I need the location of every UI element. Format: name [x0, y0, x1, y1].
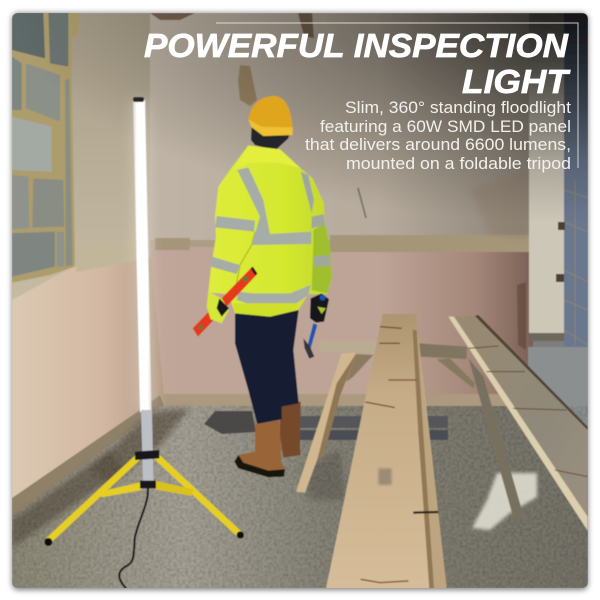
description: mounted on a foldable tripod	[346, 155, 571, 173]
left glove grip	[217, 298, 229, 317]
right wall and blocks	[529, 13, 588, 358]
hammer	[303, 323, 317, 359]
description: that delivers around 6600 lumens,	[305, 136, 571, 154]
right plank	[448, 315, 588, 531]
legs	[296, 353, 357, 493]
back wall	[148, 13, 533, 415]
sleeve seam	[236, 232, 256, 284]
brick window	[12, 13, 80, 283]
left glove	[207, 292, 229, 323]
description: featuring a 60W SMD LED panel	[320, 118, 571, 136]
cable	[119, 488, 148, 589]
dark corner overlay	[68, 13, 588, 208]
right glove	[310, 293, 329, 323]
jacket	[208, 145, 332, 317]
lower bracket	[140, 481, 156, 488]
title frame	[216, 23, 578, 168]
sawhorse	[296, 340, 524, 520]
trousers	[235, 310, 299, 424]
tripod	[44, 450, 244, 589]
left foot	[44, 538, 52, 546]
left wall	[12, 13, 165, 520]
light tube	[133, 100, 152, 412]
worker	[193, 96, 332, 477]
center plank	[326, 314, 447, 589]
pole	[141, 410, 154, 484]
title: POWERFUL INSPECTION	[144, 27, 569, 64]
description	[305, 99, 571, 173]
title: LIGHT	[462, 63, 571, 100]
hem band	[233, 303, 298, 317]
title	[144, 27, 571, 100]
hair and neck	[250, 127, 290, 150]
glow	[131, 100, 156, 410]
helmet	[248, 96, 293, 136]
beam	[319, 340, 377, 353]
spirit level	[193, 267, 257, 337]
floor	[12, 347, 588, 588]
front boot	[234, 420, 285, 477]
description: Slim, 360° standing floodlight	[345, 99, 571, 117]
upper bracket	[135, 450, 159, 460]
tube cap	[133, 97, 144, 102]
floodlight on tripod	[44, 97, 244, 589]
right foot	[237, 531, 244, 539]
bright patch on floor	[472, 473, 537, 530]
pipes on floor	[204, 411, 448, 440]
reflective strips	[237, 167, 311, 245]
back boot	[280, 402, 301, 458]
